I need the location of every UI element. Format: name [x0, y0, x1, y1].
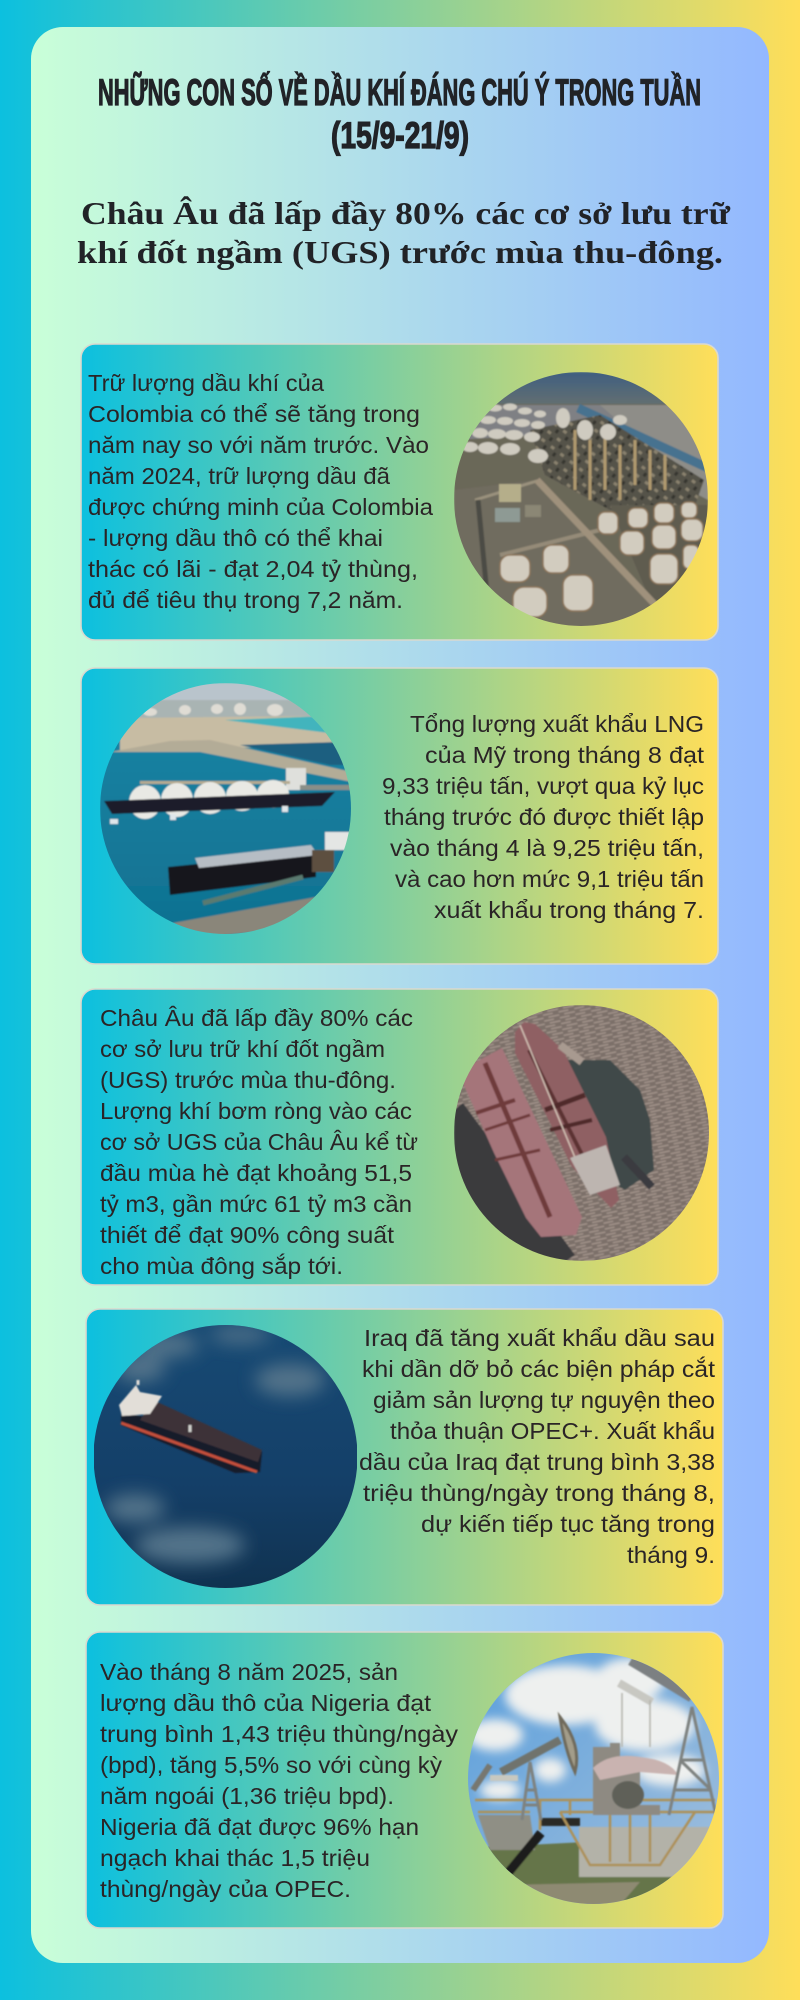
photo: LNG carriers	[100, 683, 352, 940]
text: Colombia: năm 2024, trữ lượng dầu đã	[88, 463, 390, 489]
panel: Europe gas storage	[81, 989, 718, 1285]
text: Iraq: khi dần dỡ bỏ các biện pháp cắt	[362, 1356, 716, 1382]
text: Colombia: - lượng dầu thô có thể khai	[88, 525, 383, 551]
photo: oil pumpjacks	[467, 1653, 720, 1905]
text: Nigeria: (bpd), tăng 5,5% so với cùng kỳ	[100, 1752, 443, 1778]
title: (15/9-21/9)	[331, 115, 469, 156]
panel: Nigeria output	[86, 1632, 723, 1928]
title	[98, 71, 701, 156]
text: Iraq: dầu của Iraq đạt trung bình 3,38	[359, 1449, 715, 1475]
text: Colombia: năm nay so với năm trước. Vào	[88, 432, 429, 458]
text: Nigeria: ngạch khai thác 1,5 triệu	[100, 1845, 370, 1871]
text: Europe: Lượng khí bơm ròng vào các	[100, 1098, 412, 1124]
subtitle: Châu Âu đã lấp đầy 80% các cơ sở lưu trữ	[81, 195, 731, 231]
panel: Iraq exports	[86, 1309, 723, 1605]
text: LNG: Tổng lượng xuất khẩu LNG	[410, 711, 704, 737]
text: Nigeria: trung bình 1,43 triệu thùng/ngày	[100, 1721, 459, 1747]
subtitle	[77, 195, 731, 270]
text: Europe: thiết để đạt 90% công suất	[100, 1222, 395, 1248]
text: Colombia	[88, 370, 433, 613]
text: LNG	[382, 711, 705, 923]
text: Nigeria: Nigeria đã đạt được 96% hạn	[100, 1814, 419, 1840]
text: Colombia: thác có lãi - đạt 2,04 tỷ thùng,	[88, 556, 418, 582]
photo: tankers from above	[454, 1005, 710, 1265]
text: Europe: (UGS) trước mùa thu-đông.	[100, 1067, 396, 1093]
text: Iraq: giảm sản lượng tự nguyện theo	[373, 1387, 715, 1413]
text: Europe: cho mùa đông sắp tới.	[100, 1253, 343, 1279]
panel: US LNG exports	[81, 668, 718, 964]
text: Iraq: tháng 9.	[627, 1542, 715, 1568]
text: Nigeria: lượng dầu thô của Nigeria đạt	[100, 1690, 432, 1716]
text: Europe	[100, 1005, 418, 1279]
text: Europe: tỷ m3, gần mức 61 tỷ m3 cần	[100, 1191, 412, 1217]
text: Iraq: Iraq đã tăng xuất khẩu dầu sau	[364, 1325, 715, 1351]
subtitle: khí đốt ngầm (UGS) trước mùa thu-đông.	[77, 234, 723, 270]
text: Colombia: Colombia có thể sẽ tăng trong	[88, 401, 420, 427]
text: LNG: tháng trước đó được thiết lập	[384, 804, 704, 830]
text: Iraq: dự kiến tiếp tục tăng trong	[421, 1511, 715, 1537]
text: LNG: 9,33 triệu tấn, vượt qua kỷ lục	[382, 773, 704, 799]
text: Nigeria: năm ngoái (1,36 triệu bpd).	[100, 1783, 394, 1809]
text: LNG: và cao hơn mức 9,1 triệu tấn	[395, 866, 704, 892]
text: Colombia: Trữ lượng dầu khí của	[88, 370, 324, 396]
text: Iraq: thỏa thuận OPEC+. Xuất khẩu	[390, 1418, 715, 1444]
text: Colombia: đủ để tiêu thụ trong 7,2 năm.	[88, 587, 403, 613]
text: LNG: vào tháng 4 là 9,25 triệu tấn,	[390, 835, 704, 861]
text: Nigeria: Vào tháng 8 năm 2025, sản	[100, 1659, 398, 1685]
text: Europe: cơ sở lưu trữ khí đốt ngầm	[100, 1036, 385, 1062]
text: Iraq: triệu thùng/ngày trong tháng 8,	[363, 1480, 715, 1506]
text: Europe: cơ sở UGS của Châu Âu kể từ	[100, 1129, 418, 1155]
text: Colombia: được chứng minh của Colombia	[88, 494, 433, 520]
text: Nigeria	[100, 1659, 459, 1902]
text: Nigeria: thùng/ngày của OPEC.	[100, 1876, 351, 1902]
text: Iraq	[359, 1325, 716, 1568]
text: Europe: đầu mùa hè đạt khoảng 51,5	[100, 1160, 412, 1186]
photo: tanker at sea	[94, 1325, 357, 1589]
text: LNG: của Mỹ trong tháng 8 đạt	[425, 742, 705, 768]
text: Europe: Châu Âu đã lấp đầy 80% các	[100, 1005, 413, 1031]
panel: Colombia reserves	[81, 344, 718, 640]
photo: refinery tank farm	[454, 372, 708, 630]
text: LNG: xuất khẩu trong tháng 7.	[434, 897, 704, 923]
